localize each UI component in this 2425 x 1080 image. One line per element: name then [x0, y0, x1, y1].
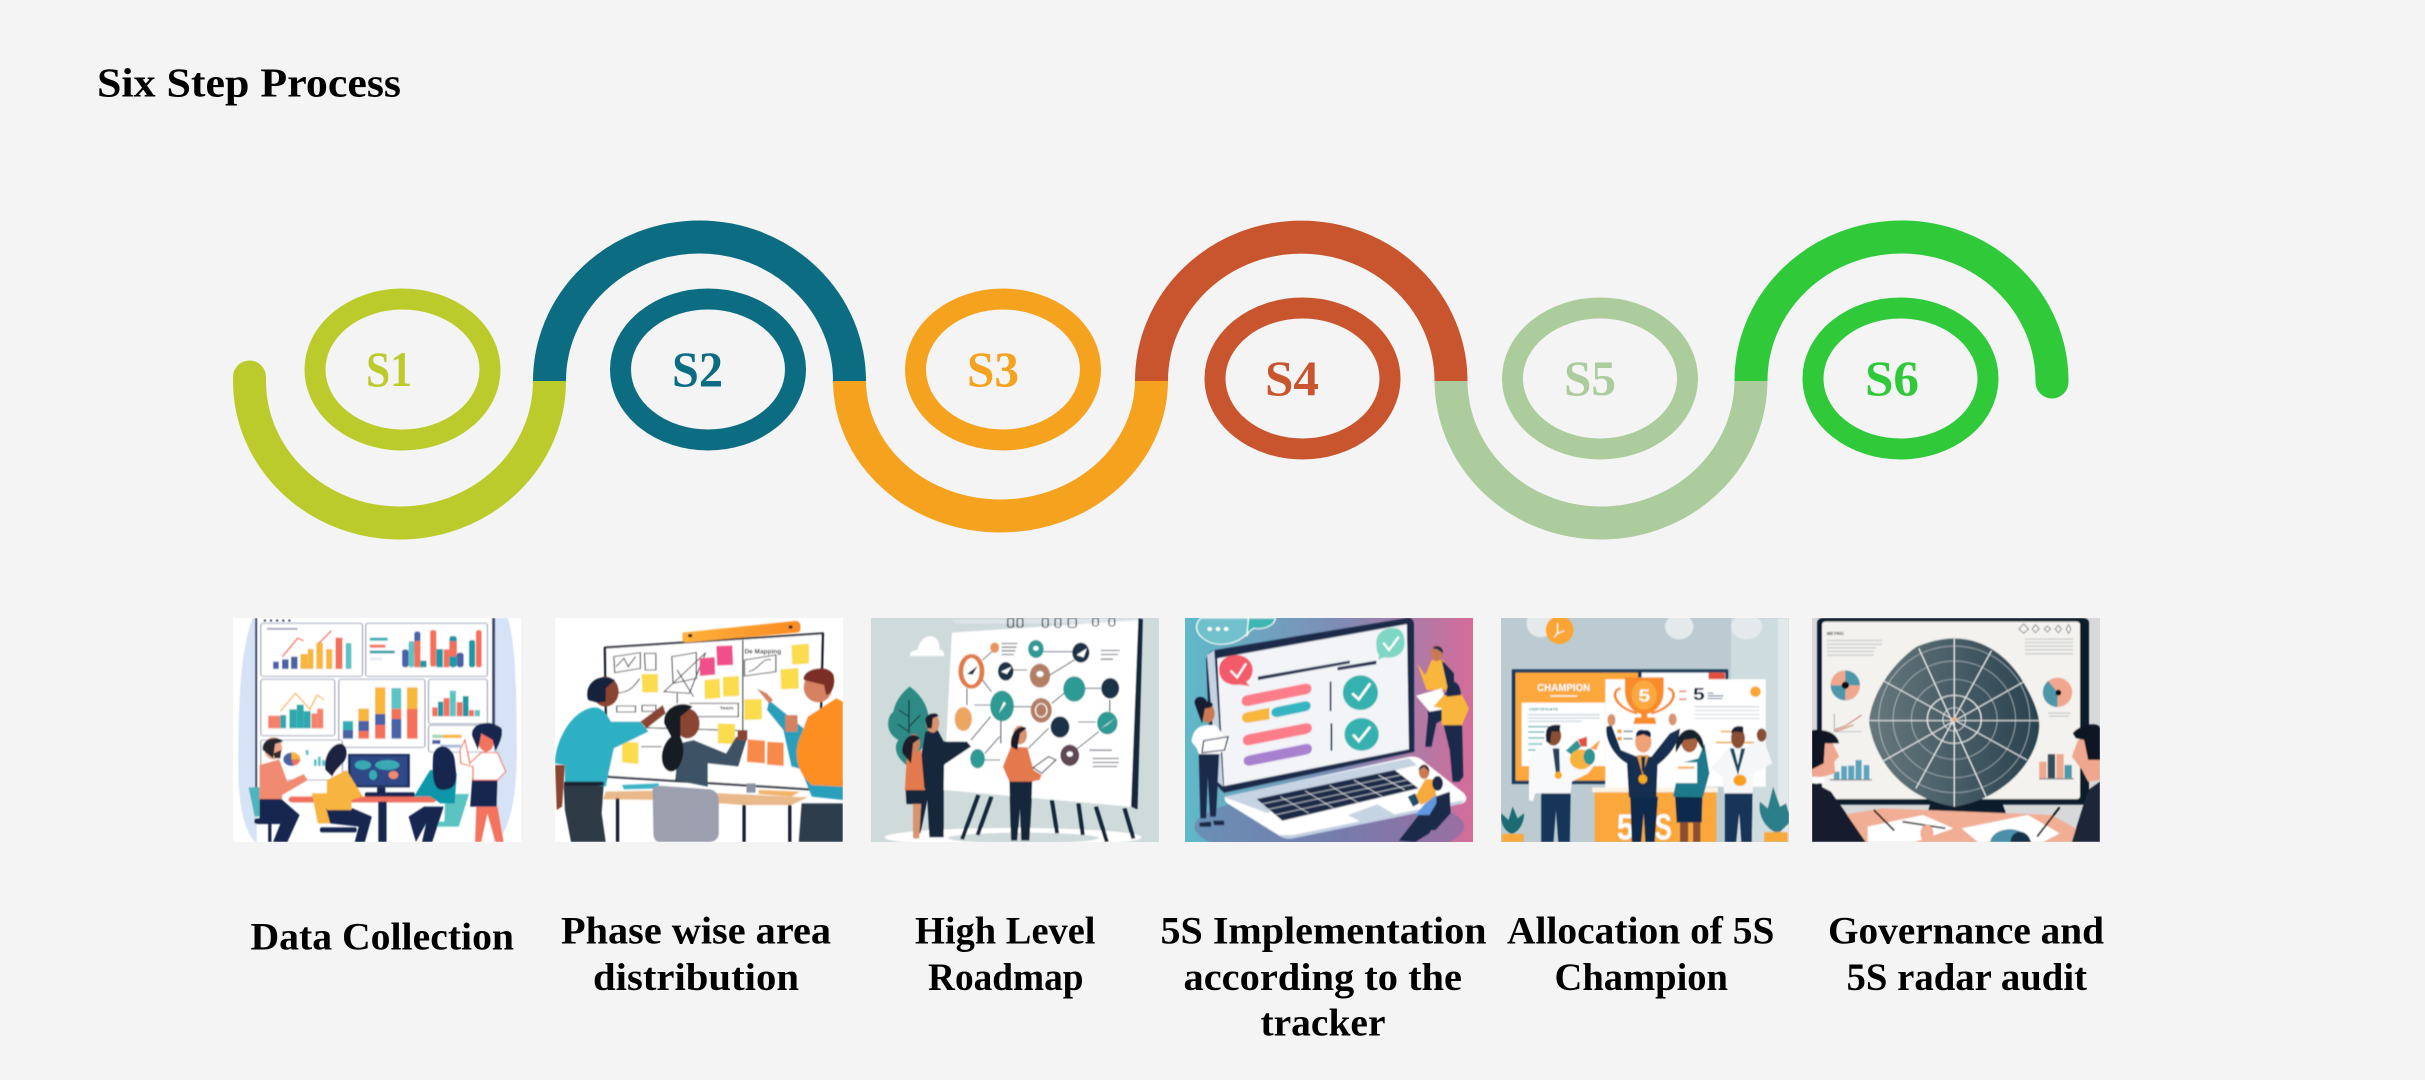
person: seated woman yellow	[312, 744, 372, 842]
bar chart: top right	[370, 630, 482, 667]
illustration: governance radar audit on monitor	[1812, 618, 2100, 842]
text lines on board	[1002, 643, 1120, 767]
champion board: CERTIFICATE	[1529, 707, 1558, 712]
arc: step 4 upper curve	[1152, 237, 1451, 381]
illustration: team reviewing data dashboards	[233, 618, 521, 842]
small pie and bars	[283, 750, 325, 766]
wall panel	[1731, 618, 1789, 842]
laptop base and keyboard	[1223, 757, 1466, 839]
illustration: team planning at whiteboard with sticky notes	[555, 618, 843, 842]
step marker S3	[916, 299, 1090, 440]
illustration: team planning at whiteboard with sticky notes: Team	[720, 706, 733, 711]
monitor with map	[348, 754, 415, 798]
table	[289, 797, 436, 842]
flowchart connectors	[967, 650, 1110, 760]
screen header and text lines	[1827, 624, 2073, 656]
whiteboard sketches	[614, 653, 776, 747]
label: Phase wise area distribution	[561, 910, 831, 999]
label: Governance and 5S radar audit: 5S radar audit	[1846, 956, 2087, 999]
label: Governance and 5S radar audit: Governance and	[1828, 910, 2104, 953]
label: Allocation of 5S Champion	[1507, 910, 1774, 999]
illustration: 5S champion award ceremony	[1501, 609, 1789, 847]
person: right man	[757, 668, 843, 842]
people: two seated on laptop	[1399, 764, 1451, 842]
label: 5S Implementation according to the tracker: tracker	[1260, 1002, 1386, 1045]
label: Allocation of 5S Champion: Champion	[1554, 956, 1728, 999]
label: Phase wise area distribution: distribution	[593, 956, 799, 999]
arc: step 1 lower curve	[233, 360, 550, 523]
step marker S3: S3	[967, 341, 1019, 397]
desk papers	[1812, 807, 2100, 842]
green check bubble	[1376, 628, 1404, 659]
label: High Level Roadmap: High Level	[915, 910, 1096, 953]
board	[952, 618, 1138, 623]
desk	[603, 783, 808, 842]
whiteboard	[605, 633, 823, 789]
champion board: CHAMPION	[1537, 683, 1590, 694]
label: High Level Roadmap	[915, 910, 1096, 999]
label: Data Collection: Data Collection	[250, 916, 514, 958]
person: seated woman teal	[409, 746, 469, 842]
spiral binding	[1008, 618, 1115, 627]
orange marker tray	[682, 621, 800, 643]
speech bubbles	[1196, 618, 1276, 644]
champion board	[1512, 669, 1728, 784]
plant left	[1501, 807, 1524, 842]
monitor	[1817, 618, 2089, 815]
wave track: six connected arcs	[233, 237, 2068, 523]
sticky notes	[622, 644, 809, 766]
label: Allocation of 5S Champion: Allocation of 5S	[1507, 910, 1774, 953]
tree	[888, 687, 930, 767]
step marker S5	[1512, 308, 1688, 449]
step marker S1	[315, 299, 490, 440]
person: right man	[1711, 726, 1772, 842]
pedestal	[1592, 787, 1718, 847]
infographic canvas	[99, 68, 2104, 1036]
person: seated man	[249, 737, 308, 842]
label: Phase wise area distribution: Phase wise area	[561, 910, 831, 953]
certificates	[1605, 679, 1766, 789]
step marker S4	[1215, 308, 1390, 449]
label: 5S Implementation according to the tracker	[1160, 910, 1487, 1045]
radar chart	[1869, 638, 2039, 807]
pedestal: 5	[1617, 807, 1634, 847]
laptop screen	[1206, 618, 1414, 793]
pie chart left	[1831, 670, 1860, 700]
person: woman with notebook	[902, 734, 925, 838]
arc: step 5 lower curve	[1451, 380, 1751, 523]
label: Governance and 5S radar audit	[1828, 910, 2104, 999]
bar chart: top left	[267, 628, 351, 669]
people: two standing at right	[1416, 646, 1469, 782]
bar chart: middle right	[432, 691, 480, 748]
step marker S6: S6	[1865, 350, 1919, 406]
screen header and text lines: METRIC	[1827, 631, 1845, 637]
illustration: team planning at whiteboard with sticky notes: De Mapping	[744, 647, 782, 655]
person: man in suit	[913, 714, 971, 837]
label: High Level Roadmap: Roadmap	[928, 956, 1084, 999]
arc: step 3 lower curve	[850, 380, 1152, 516]
cloud	[910, 636, 944, 656]
stacked bars: centre	[343, 687, 418, 739]
person: standing woman	[460, 723, 506, 842]
line chart left	[1834, 713, 1862, 732]
plant right	[1759, 787, 1789, 842]
step marker S1: S1	[366, 341, 412, 397]
illustration: roadmap flowchart on easel	[871, 618, 1159, 847]
person: center man arms raised	[1606, 713, 1680, 842]
illustration: laptop checklist tracker	[1185, 618, 1473, 860]
check circles	[1343, 675, 1379, 751]
label: 5S Implementation according to the tracker: 5S Implementation	[1160, 910, 1487, 953]
checklist bars	[1242, 661, 1376, 766]
person: left man with white coat	[1529, 725, 1600, 842]
person: woman with tablet	[1191, 697, 1229, 827]
chair	[653, 786, 719, 842]
step marker S2: S2	[672, 341, 723, 397]
bar chart right	[2039, 754, 2074, 779]
person: left auditor	[1812, 730, 1866, 842]
step marker S6	[1813, 308, 1988, 449]
pie chart right	[2043, 678, 2072, 717]
person: right auditor	[2072, 724, 2100, 842]
bar chart left	[1830, 760, 1872, 780]
trophy: 5	[1638, 686, 1650, 706]
label: 5S Implementation according to the tracker: according to the	[1184, 956, 1462, 999]
person: woman with certificate	[1673, 729, 1709, 842]
person: left man pointing	[555, 677, 666, 842]
flowchart nodes	[955, 640, 1119, 768]
line and bar chart: middle left	[268, 693, 324, 728]
red check bubble	[1219, 655, 1253, 686]
person: seated woman	[662, 704, 747, 787]
person: woman with clipboard	[1003, 726, 1056, 841]
trophy	[1615, 677, 1674, 724]
floor shadow	[1194, 804, 1464, 842]
step marker S2	[620, 299, 796, 440]
ceiling lights	[1527, 609, 1762, 639]
easel legs	[962, 795, 1133, 842]
title: Six Step Process	[97, 60, 401, 106]
step marker S4: S4	[1265, 350, 1319, 406]
pedestal: S	[1655, 807, 1672, 847]
clock	[1546, 616, 1573, 644]
certificates: 5	[1693, 685, 1705, 704]
floor	[884, 826, 1142, 842]
arc: step 2 upper curve	[550, 237, 850, 381]
arc: step 6 upper curve	[1751, 237, 2068, 398]
step marker S5: S5	[1564, 350, 1616, 406]
